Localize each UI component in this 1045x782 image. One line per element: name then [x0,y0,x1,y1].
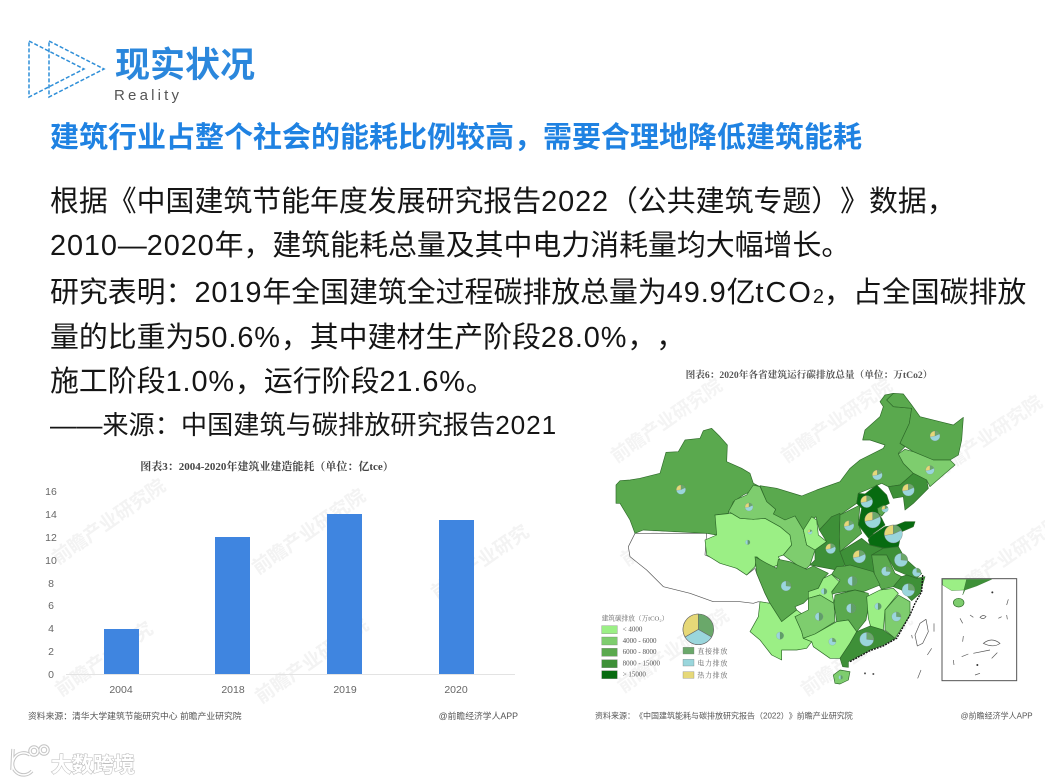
map chart: provincial carbon emissions: 前瞻产业研究院 [617,478,736,570]
text block: body paragraph: ——来源：中国建筑与碳排放研究报告2021 [50,410,557,440]
heading: 建筑行业占整个社会的能耗比例较高，需要合理地降低建筑能耗 [50,122,862,154]
map legend: emission types: 热力排放 [697,670,728,679]
y axis labels: 16 [45,486,57,498]
map legend: emission levels: 8000 - 15000 [623,659,660,667]
map legend: emission types: 直接排放 [697,646,728,655]
y axis labels: 2 [48,646,54,658]
y axis labels: 8 [48,578,54,590]
text block: body paragraph: 施工阶段1.0%，运行阶段21.6%。 [50,366,495,398]
map legend: emission types: 电力排放 [697,658,728,667]
watermark: logo and brand [10,744,135,777]
pie markers [676,431,940,679]
map chart: provincial carbon emissions: 前瞻产业研究院 [614,604,733,697]
map chart: provincial carbon emissions: 前瞻产业研究院 [777,374,896,467]
y axis labels: 0 [48,669,54,681]
bar chart: construction energy use: 前瞻产业研究院 [251,613,373,708]
map legend: emission levels [602,613,668,679]
x axis labels: 2020 [444,684,468,696]
map chart: provincial carbon emissions: 前瞻产业研究院 [607,374,726,467]
chart source: 资料来源：清华大学建筑节能研究中心 前瞻产业研究院 [28,710,242,721]
y axis labels: 10 [45,555,57,567]
map legend: emission types [683,614,728,679]
map chart: provincial carbon emissions: 前瞻产业研究院 [797,608,916,700]
x axis labels: 2019 [333,684,357,696]
title: 现实状况 [115,46,255,85]
map legend: emission levels: > 15000 [623,670,646,678]
map chart: provincial carbon emissions [595,369,1045,721]
text block: body paragraph: 根据《中国建筑节能年度发展研究报告2022（公共建筑专题）》数据， [50,186,956,218]
chart source [28,710,518,721]
watermark: logo and brand: 大数跨境 [51,754,135,777]
y axis labels: 14 [45,509,57,521]
y axis labels: 12 [45,532,57,544]
x axis labels [109,684,468,696]
bar chart: construction energy use: 前瞻产业研究院 [48,474,170,569]
map legend: emission levels: 4000 - 6000 [623,637,657,645]
chart source: @前瞻经济学人APP [439,710,518,721]
bars [104,514,474,674]
inset map: South China Sea [942,579,1017,681]
provinces [616,393,963,622]
icon: dashed double triangle [28,40,106,98]
map source [595,711,1033,721]
chart title: 图表3：2004-2020年建筑业建造能耗（单位：亿tce） [140,459,394,473]
map legend: emission levels: < 4000 [623,626,643,634]
text block: body paragraph [50,186,1026,440]
text block: body paragraph: 2010—2020年，建筑能耗总量及其中电力消耗量均大幅增长。 [50,230,850,262]
bar chart: construction energy use: 前瞻产业研究院 [248,484,370,579]
bar chart: construction energy use: 前瞻产业研究 [51,617,157,701]
map legend: emission levels: 建筑碳排放（万tCO₂） [602,613,668,622]
map chart: provincial carbon emissions: 前瞻产业研究院 [927,391,1045,483]
nine-dash marks [864,623,934,678]
map source: @前瞻经济学人APP [961,711,1033,721]
subtitle: Reality: Reality [114,87,182,104]
bar chart: construction energy use [28,459,530,721]
y axis labels [45,486,57,681]
map source: 资料来源：《中国建筑能耗与碳排放研究报告（2022）》前瞻产业研究院 [595,711,853,721]
x axis labels: 2018 [221,684,245,696]
text block: body paragraph: 研究表明：2019年全国建筑全过程碳排放总量为49.9亿tCO2，占全国碳排放 [50,277,1026,309]
map legend: emission levels: 6000 - 8000 [623,648,657,656]
y axis labels: 6 [48,600,54,612]
text block: body paragraph: 量的比重为50.6%，其中建材生产阶段28.0%，， [50,322,685,354]
map title: 图表6：2020年各省建筑运行碳排放总量（单位：万tCo2） [686,369,932,381]
y axis labels: 4 [48,623,54,635]
x axis labels: 2004 [109,684,133,696]
